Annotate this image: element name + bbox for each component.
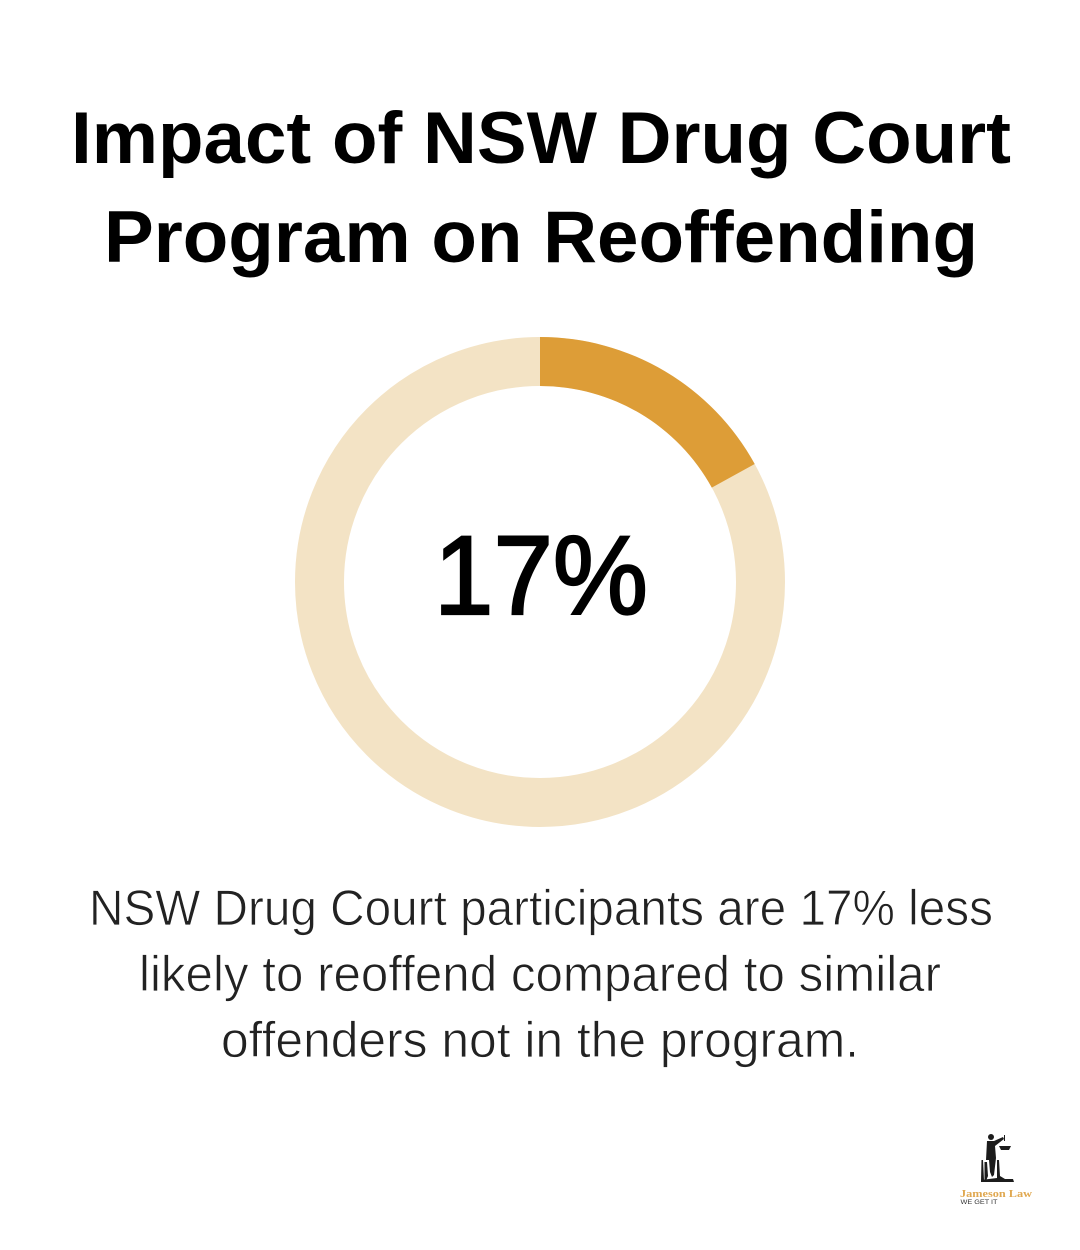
title (71, 98, 1011, 278)
logo name: Jameson Law (960, 1189, 1032, 1200)
description text: likely to reoffend compared to similar (139, 946, 941, 1002)
description text (89, 880, 993, 1068)
description text: offenders not in the program. (221, 1012, 859, 1068)
logo tagline: WE GET IT (960, 1199, 998, 1206)
donut chart (320, 337, 760, 802)
title: Impact of NSW Drug Court (71, 98, 1011, 179)
title: Program on Reoffending (104, 197, 978, 278)
logo: Jameson Law (960, 1134, 1032, 1206)
icon: lady justice (981, 1134, 1014, 1182)
donut track (320, 362, 760, 802)
donut segment: 17% (540, 337, 755, 488)
description text: NSW Drug Court participants are 17% less (89, 880, 993, 936)
center value: 17% (434, 513, 648, 638)
